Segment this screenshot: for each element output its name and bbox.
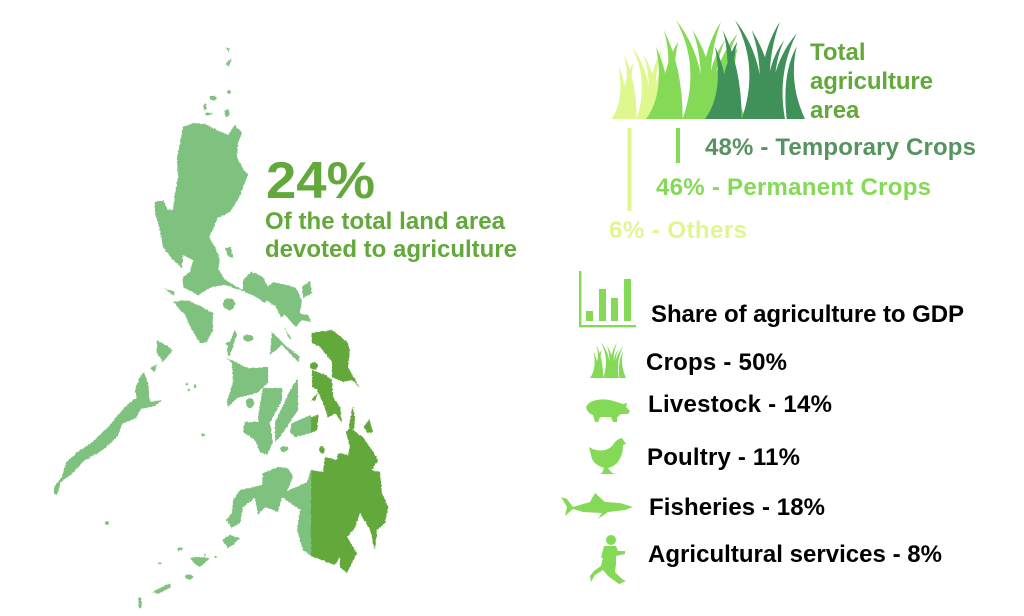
grass title: area	[810, 97, 860, 124]
Mindanao	[226, 428, 388, 573]
poultry label: Poultry - 11%	[647, 444, 800, 471]
light grass	[612, 47, 680, 119]
Palawan and Sulu	[54, 340, 240, 608]
agricultural services label: Agricultural services - 8%	[648, 541, 942, 568]
grass title: Total	[810, 39, 866, 66]
others label: 6% - Others	[609, 217, 747, 244]
medium grass	[646, 20, 746, 119]
icon: pig	[586, 399, 630, 422]
permanent crops label: 46% - Permanent Crops	[656, 174, 931, 201]
map of the Philippines	[54, 47, 388, 608]
grass title	[810, 39, 933, 124]
GDP share heading: Share of agriculture to GDP	[651, 301, 964, 328]
fisheries label: Fisheries - 18%	[649, 494, 825, 521]
icon: running child	[590, 535, 626, 584]
dark grass	[705, 20, 805, 119]
headline statistic: devoted to agriculture	[265, 236, 517, 263]
grass title: agriculture	[810, 68, 933, 95]
crops label: Crops - 50%	[646, 349, 787, 376]
headline description: Of the total land area	[265, 208, 506, 235]
icon: chicken	[589, 438, 626, 474]
leader line: others	[628, 128, 632, 211]
icon: bar chart	[579, 271, 636, 327]
Visayas islands	[225, 327, 311, 455]
headline statistic	[265, 152, 517, 263]
temporary crops label: 48% - Temporary Crops	[705, 134, 976, 161]
livestock label: Livestock - 14%	[648, 391, 832, 418]
leader line: permanent crops	[676, 128, 680, 163]
24%: 24%	[266, 152, 375, 210]
icon: grass	[590, 342, 626, 378]
icon: shark	[561, 493, 633, 519]
grass illustration	[612, 20, 805, 119]
Eastern Visayas highlighted	[310, 330, 373, 454]
Luzon region	[155, 47, 312, 350]
